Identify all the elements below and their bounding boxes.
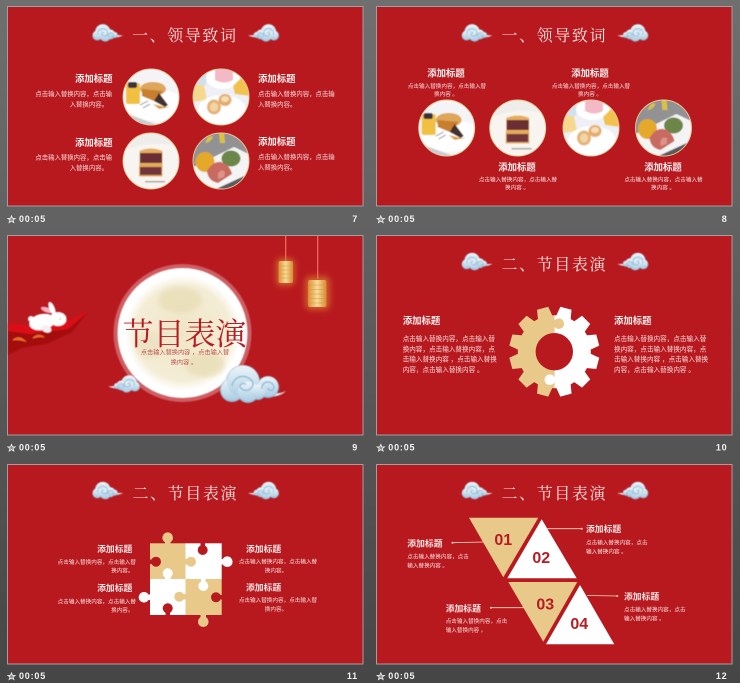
- triangle 04: 04: [570, 616, 588, 633]
- notch: left edge: [149, 557, 161, 567]
- footer: slide 7: 00:05: [19, 214, 46, 224]
- text block: upper left: 点击输入替换内容，点击输入替: [58, 558, 136, 566]
- triangle 01: [469, 518, 538, 577]
- text block: right: 添加标题: [614, 315, 652, 326]
- text block: second: [479, 162, 558, 192]
- text block: first: 换内容 。: [434, 90, 458, 98]
- text block: top left: [35, 73, 113, 108]
- text block: top left: 入替换内容。: [70, 100, 108, 108]
- text block: upper right: [239, 543, 318, 574]
- footer: slide 12: 12: [716, 671, 728, 681]
- panel: slide 12 triangles: [376, 464, 732, 681]
- text block: third: 添加标题: [571, 68, 609, 78]
- text block: lower left: 点击输入替换内容，点击输入替: [58, 598, 136, 606]
- text block: lower left: 添加标题: [97, 582, 132, 593]
- text block: 04: 输入替换内容 。: [624, 614, 665, 622]
- text block: third: 换内容 。: [578, 90, 602, 98]
- text block: 02: 添加标题: [586, 523, 621, 534]
- heading: slide 10: [462, 253, 648, 274]
- moon: [114, 264, 252, 402]
- panel: slide 10 gear: [376, 236, 732, 452]
- text block: upper right: 换内容。: [265, 566, 287, 574]
- triangle 02: [507, 519, 577, 578]
- text block: second: 点击输入替换内容，点击输入替: [479, 176, 558, 184]
- text block: right: 点击输入替换内容，点击输入替: [614, 334, 707, 343]
- text block: lower right: 换内容。: [265, 605, 287, 613]
- text block: 01: 输入替换内容 。: [407, 562, 448, 570]
- text block: top left: 点击输入替换内容，点击输: [35, 89, 113, 98]
- text block: bottom right: 点击输入替换内容，点击输: [258, 152, 335, 161]
- text block: first: 添加标题: [427, 68, 465, 78]
- text block: upper left: 添加标题: [97, 543, 132, 554]
- piece: bottom right: [174, 578, 222, 627]
- text block: left: 点击输入替换内容，点击输入替: [403, 334, 495, 343]
- title: 节目表演: 节目表演: [122, 317, 249, 352]
- photo: red bean mooncake: [122, 132, 180, 190]
- text block: left: 击输入替换内容 ，点击输入替换: [403, 354, 497, 364]
- heading: slide 8: [462, 24, 648, 45]
- text block: fourth: 添加标题: [644, 162, 682, 172]
- photo: coloured mooncakes: [189, 132, 253, 190]
- triangle 04: [546, 585, 614, 644]
- puzzle diagram: [139, 532, 233, 627]
- text block: left: 添加标题: [403, 315, 441, 326]
- text block: lower right: [239, 582, 318, 613]
- heading: slide 11: [92, 482, 279, 503]
- text block: 01: 点击输入替换内容，点击: [407, 552, 469, 560]
- moon subtitle: 点击输入替换内容 ，点击输入替: [141, 348, 229, 356]
- heading: slide 11: 二、节目表演: [132, 484, 239, 503]
- text block: left: [403, 315, 497, 374]
- text block: lower right: 点击输入替换内容，点击输入替: [239, 596, 318, 604]
- heading: slide 12: [462, 482, 648, 503]
- arrow: 04 label: [587, 595, 618, 597]
- gear diagram: [509, 306, 600, 397]
- text block: top right: [258, 73, 335, 108]
- text block: right: 换内容，点击输入替换内容，点: [614, 344, 707, 354]
- text block: left: 换内容，点击输入替换内容，点: [403, 344, 495, 354]
- text block: right: 内容，点击输入替换内容 。: [614, 365, 695, 374]
- photo: mooncake on plate: [418, 99, 481, 157]
- triangle 03: 03: [536, 596, 554, 614]
- photo: mooncakes and pink cup: [192, 67, 250, 126]
- text block: bottom left: [35, 137, 113, 172]
- footer: slide 9: 00:05: [19, 442, 46, 452]
- heading: slide 12: 二、节目表演: [502, 484, 608, 503]
- footer: slide 12: 00:05: [388, 671, 415, 681]
- text block: right: 击输入替换内容 ，点击输入替换: [614, 354, 709, 364]
- text block: bottom right: [258, 136, 335, 172]
- lantern: small: [276, 236, 295, 286]
- footer: slide 11: [8, 671, 358, 681]
- photo: red bean mooncake: [489, 99, 547, 157]
- text block: right: [614, 315, 709, 374]
- panel: slide 8: [376, 6, 732, 224]
- text block: first: [408, 68, 487, 98]
- text block: 01: 添加标题: [407, 538, 443, 548]
- photo: mooncake on plate: [122, 68, 185, 126]
- text block: second: 换内容 。: [505, 184, 529, 192]
- text block: lower right: 添加标题: [246, 582, 281, 592]
- text block: upper left: 换内容。: [111, 566, 134, 574]
- footer: slide 7: [8, 214, 358, 224]
- footer: slide 12: [377, 671, 728, 681]
- text block: top right: 点击输入替换内容，点击输: [258, 89, 335, 98]
- heading: slide 10: 二、节目表演: [502, 255, 608, 274]
- text block: bottom right: 添加标题: [258, 136, 296, 147]
- arrow: 03 label: [490, 607, 524, 609]
- footer: slide 10: 10: [716, 442, 728, 452]
- text block: 03: 输入替换内容 。: [446, 626, 486, 634]
- text block: bottom left: 入替换内容。: [70, 163, 108, 172]
- text block: first: 点击输入替换内容，点击输入替: [408, 82, 487, 90]
- heading: slide 8: 一、领导致词: [502, 27, 607, 45]
- text block: 03: 添加标题: [446, 602, 481, 614]
- text block: 03: [446, 602, 508, 634]
- rabbit on red ribbon: [8, 301, 88, 355]
- text block: top left: 添加标题: [75, 73, 113, 84]
- text block: left: 内容，点击输入替换内容 。: [403, 365, 484, 374]
- panel: slide 9 section cover: [8, 236, 363, 452]
- photo: coloured mooncakes: [632, 99, 696, 157]
- footer: slide 11: 11: [347, 671, 358, 681]
- footer: slide 10: [377, 442, 728, 452]
- cloud: large: [220, 365, 286, 403]
- text block: bottom left: 点击输入替换内容，点击输: [35, 152, 113, 162]
- footer: slide 10: 00:05: [388, 442, 415, 452]
- footer: slide 7: 7: [352, 214, 358, 224]
- text block: 04: [624, 590, 686, 622]
- photo: mooncakes and pink cup: [562, 98, 620, 157]
- heading: slide 7: [92, 24, 279, 45]
- text block: 01: [407, 538, 469, 570]
- text block: top right: 入替换内容。: [258, 100, 296, 108]
- piece: bottom left: [139, 568, 186, 616]
- text block: 02: [586, 523, 648, 556]
- moon subtitle: [141, 348, 229, 366]
- text block: 03: 点击输入替换内容，点击: [446, 617, 508, 625]
- text block: second: 添加标题: [498, 162, 536, 172]
- heading: slide 7: 一、领导致词: [132, 27, 238, 45]
- footer: slide 8: [377, 214, 728, 224]
- text block: third: 点击输入替换内容，点击输入替: [552, 82, 631, 90]
- text block: 04: 添加标题: [624, 590, 659, 602]
- text block: bottom right: 入替换内容。: [258, 162, 296, 172]
- text block: 04: 点击输入替换内容，点击: [624, 606, 686, 614]
- footer: slide 11: 00:05: [19, 671, 46, 681]
- footer: slide 9: 9: [352, 442, 358, 452]
- text block: third: [552, 68, 631, 98]
- text block: fourth: [624, 162, 703, 192]
- piece: top right: [184, 543, 233, 579]
- piece: top left: [150, 532, 186, 579]
- text block: bottom left: 添加标题: [75, 137, 113, 148]
- text block: upper left: [58, 543, 136, 574]
- text block: upper right: 点击输入替换内容，点击输入替: [239, 558, 318, 566]
- panel: slide 11 puzzle: [8, 464, 363, 681]
- triangle 02: 02: [532, 550, 550, 567]
- text block: upper right: 添加标题: [246, 543, 281, 554]
- lantern: large: [305, 236, 330, 310]
- text block: lower left: 换内容。: [111, 606, 134, 614]
- triangle 03: [508, 582, 577, 642]
- text block: top right: 添加标题: [258, 73, 296, 84]
- arrow: 02 label: [547, 528, 583, 530]
- panel: slide 7: [8, 6, 363, 224]
- footer: slide 8: 00:05: [388, 214, 415, 224]
- moon subtitle: 换内容 。: [171, 358, 197, 366]
- text block: fourth: 换内容 。: [651, 184, 675, 192]
- arrow: 01 label: [452, 542, 484, 544]
- text block: lower left: [58, 582, 136, 614]
- footer: slide 8: 8: [722, 214, 728, 224]
- triangle 01: 01: [494, 532, 512, 549]
- text block: 02: 输入替换内容 。: [586, 548, 627, 556]
- text block: fourth: 点击输入替换内容，点击输入替: [624, 176, 703, 184]
- text block: 02: 点击输入替换内容，点击: [586, 538, 648, 546]
- cloud: small: [108, 375, 140, 393]
- footer: slide 9: [8, 442, 358, 452]
